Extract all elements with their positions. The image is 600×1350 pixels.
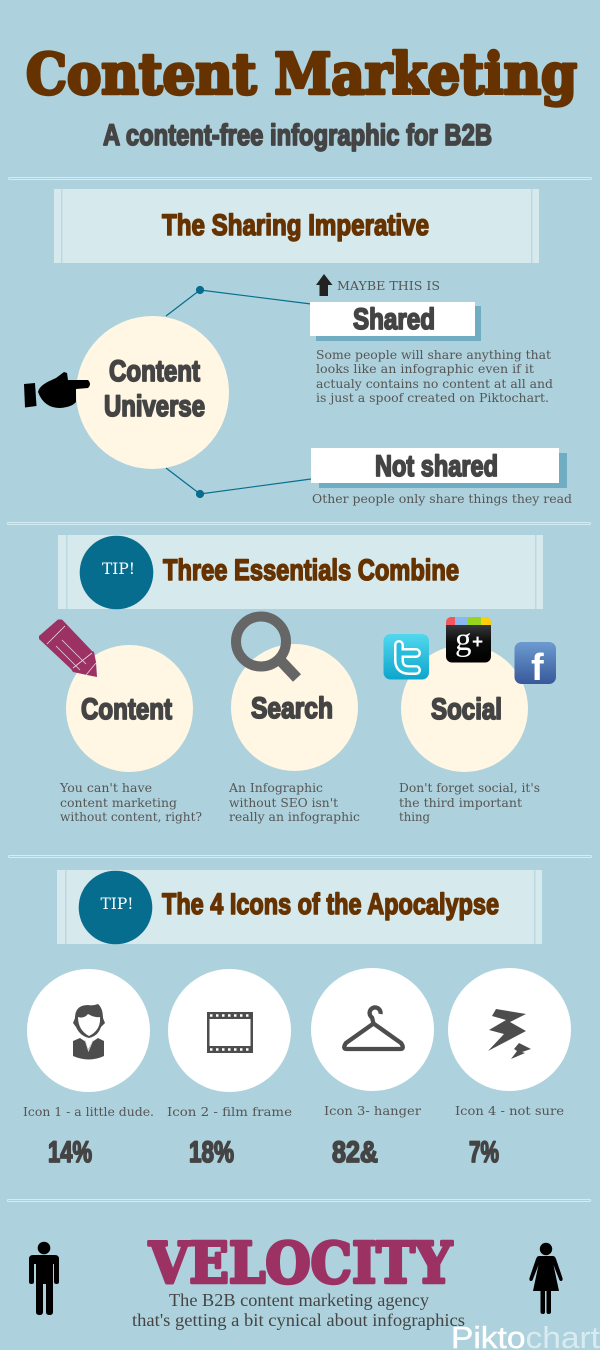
panel: four icons heading: The 4 Icons of the Apocalypse (162, 888, 499, 921)
circle: icon 2 film frame (168, 969, 291, 1092)
text: shared description: actualy contains no content at all and (316, 377, 553, 391)
stat: 18%: 18% (189, 1136, 234, 1169)
circle: search (231, 644, 358, 771)
stat: 7%: 7% (469, 1136, 499, 1169)
icon: google plus: + (472, 632, 483, 653)
icon: pointing hand (24, 372, 90, 408)
circle: icon 4 lightning (448, 968, 571, 1091)
panel: three essentials heading: Three Essentials Combine (163, 554, 459, 587)
box: not shared (311, 448, 567, 488)
label: icon 3: Icon 3- hanger (324, 1104, 421, 1118)
connector lines (166, 286, 311, 498)
brand: velocity: that's getting a bit cynical about infographics (132, 1310, 465, 1330)
circle: social (401, 645, 528, 772)
text: search description (228, 781, 360, 824)
icon: facebook (514, 642, 556, 689)
circle: icon 3 hanger (311, 968, 434, 1091)
icon: pencil (39, 620, 97, 677)
icon: woman (529, 1243, 563, 1314)
circle: content universe (76, 316, 229, 469)
box: not shared: Not shared (375, 450, 498, 483)
text: social description: thing (399, 810, 430, 824)
text: shared description: looks like an infographic even if it (316, 362, 534, 376)
circle: content (66, 645, 193, 772)
text: shared description (316, 348, 553, 405)
text: shared description: Some people will share anything that (316, 348, 551, 362)
text: social description: Don't forget social, it's (399, 781, 540, 795)
label: icon 4: Icon 4 - not sure (455, 1104, 564, 1118)
icon: man (29, 1242, 59, 1315)
circle: content universe: Content (109, 355, 200, 388)
text: search description: without SEO isn't (229, 796, 338, 810)
box: shared (310, 302, 481, 341)
text: content description: You can't have (59, 781, 152, 795)
brand: velocity (132, 1230, 465, 1330)
icon: magnifier (236, 616, 297, 678)
circle: search: Search (251, 692, 333, 725)
header (26, 42, 577, 152)
stat: 14%: 14% (48, 1136, 92, 1169)
text: not shared description: Other people only share things they read (312, 492, 572, 506)
text: content description: content marketing (60, 796, 177, 810)
label: maybe this is: MAYBE THIS IS (337, 279, 440, 293)
icon: facebook: f (531, 647, 544, 689)
text: search description: really an infographic (229, 810, 360, 824)
stat: 82&: 82& (332, 1136, 378, 1169)
panel: sharing imperative heading (54, 189, 539, 263)
icon: twitter (384, 634, 429, 680)
text: social description (399, 781, 540, 824)
brand: velocity: VELOCITY (148, 1230, 453, 1296)
panel: sharing imperative heading: The Sharing Imperative (162, 209, 429, 242)
text: content description (59, 781, 202, 824)
text: shared description: is just a spoof created on Piktochart. (316, 391, 549, 405)
brand: velocity: The B2B content marketing agency (169, 1290, 429, 1310)
panel: four icons heading: TIP! (100, 894, 134, 913)
icon: up arrow (316, 274, 332, 296)
circle: social: Social (431, 693, 502, 726)
circle: icon 1 dude (27, 969, 150, 1092)
panel: three essentials heading (58, 535, 543, 609)
label: icon 2: Icon 2 - film frame (167, 1105, 292, 1119)
text: social description: the third important (399, 796, 522, 810)
circle: content: Content (81, 693, 172, 726)
icon: google plus: g (455, 622, 472, 658)
panel: four icons heading (57, 870, 542, 944)
label: icon 1: Icon 1 - a little dude. (23, 1105, 154, 1119)
panel: three essentials heading: TIP! (102, 559, 135, 578)
icon: google plus (446, 617, 491, 662)
box: shared: Shared (353, 303, 435, 336)
circle: content universe: Universe (104, 390, 205, 423)
subtitle: A content-free infographic for B2B (103, 119, 492, 152)
text: content description: without content, right? (60, 810, 202, 824)
text: search description: An Infographic (228, 781, 323, 795)
